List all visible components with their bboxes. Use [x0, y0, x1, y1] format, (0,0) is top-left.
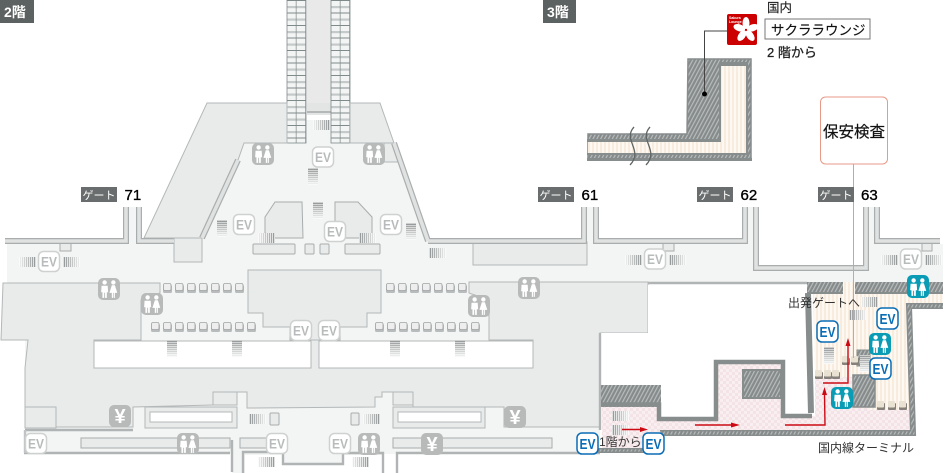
sakura lounge label: [765, 1, 870, 60]
terminal escalators: [612, 297, 878, 435]
icon: sakura lounge: Lounge: [729, 20, 742, 24]
grey EV icons: EV: [269, 436, 286, 452]
gate 62 label: ゲート: [698, 189, 732, 202]
pier walkways with moving sidewalks: [287, 0, 350, 143]
heading: 2F tag: [0, 0, 34, 23]
sakura lounge floor plan: [587, 59, 752, 165]
gate 63 label: ゲート: [820, 189, 852, 202]
security check box: [820, 97, 888, 164]
gate 63 label: [818, 187, 878, 204]
gate walls: [5, 143, 940, 473]
blue EV icons: EV: [580, 436, 596, 453]
domestic terminal: beige hall: [813, 282, 943, 410]
gate 61 label: [538, 187, 598, 204]
map labels: 出発ゲートへ: [788, 296, 860, 310]
grey EV icons: EV: [315, 149, 332, 165]
heading: 3F tag: [543, 0, 576, 23]
dark floor blocks: left and right wings: [1, 270, 648, 428]
gate 61 label: ゲート: [540, 189, 572, 202]
heading: 2F tag: 2階: [4, 4, 26, 20]
yen exchange icons: ¥: [426, 434, 438, 456]
sakura lounge leader line: [702, 31, 727, 96]
icon: sakura lounge: Sakura: [729, 16, 741, 20]
gate 71 label: ゲート: [82, 189, 116, 202]
map labels: 国内線ターミナル: [818, 440, 914, 455]
grey EV icons: EV: [647, 251, 664, 267]
sakura lounge label: 2 階から: [767, 45, 817, 60]
icon: sakura lounge: [727, 14, 759, 45]
escalators: [19, 120, 942, 467]
map labels: 1階から: [599, 435, 642, 449]
grey EV icons: EV: [41, 254, 58, 270]
grey EV icons: EV: [383, 216, 400, 232]
side wings of central hall: [144, 103, 587, 265]
domestic terminal: hatched walls: [597, 282, 943, 450]
sakura lounge label: 国内: [767, 1, 792, 15]
teal restroom icons: [831, 275, 929, 409]
yen exchange icons: ¥: [509, 407, 521, 429]
heading: 3F tag: 3階: [547, 4, 569, 20]
security check box: 保安検査: [823, 123, 885, 141]
grey EV icons: EV: [293, 322, 310, 338]
blue EV icons: EV: [880, 311, 896, 328]
sakura lounge label: サクララウンジ: [771, 23, 866, 38]
waiting seats: [151, 284, 480, 332]
grey EV icons: EV: [236, 216, 253, 232]
grey EV icons: [26, 147, 922, 454]
gate 71 label: [81, 187, 141, 204]
grey EV icons: EV: [28, 436, 45, 452]
gate 61 label: 61: [582, 187, 598, 204]
gate 63 label: 63: [861, 187, 878, 204]
floor base: 2F concourse: [3, 120, 943, 473]
blue EV icons: EV: [820, 324, 836, 341]
grey restroom icons: [98, 143, 540, 455]
yen exchange icons: [109, 405, 526, 456]
yen exchange icons: ¥: [114, 406, 126, 428]
white openings in the floor: [94, 285, 808, 473]
blue EV icons: [577, 308, 898, 454]
grey EV icons: EV: [332, 436, 349, 452]
blue EV icons: EV: [872, 361, 888, 378]
security check connector line: [852, 164, 854, 358]
map labels: [599, 296, 914, 455]
domestic terminal: pink corridor: [602, 362, 912, 450]
gate 71 label: 71: [124, 187, 141, 204]
terminal seats: [815, 356, 907, 410]
grey EV icons: EV: [327, 224, 344, 240]
gate 62 label: 62: [740, 187, 757, 204]
blue EV icons: EV: [646, 436, 662, 453]
grey EV icons: EV: [321, 322, 338, 338]
interior blocks: [60, 202, 932, 448]
grey EV icons: EV: [903, 251, 920, 267]
red route arrows: [622, 338, 850, 432]
gate 62 label: [697, 187, 757, 204]
